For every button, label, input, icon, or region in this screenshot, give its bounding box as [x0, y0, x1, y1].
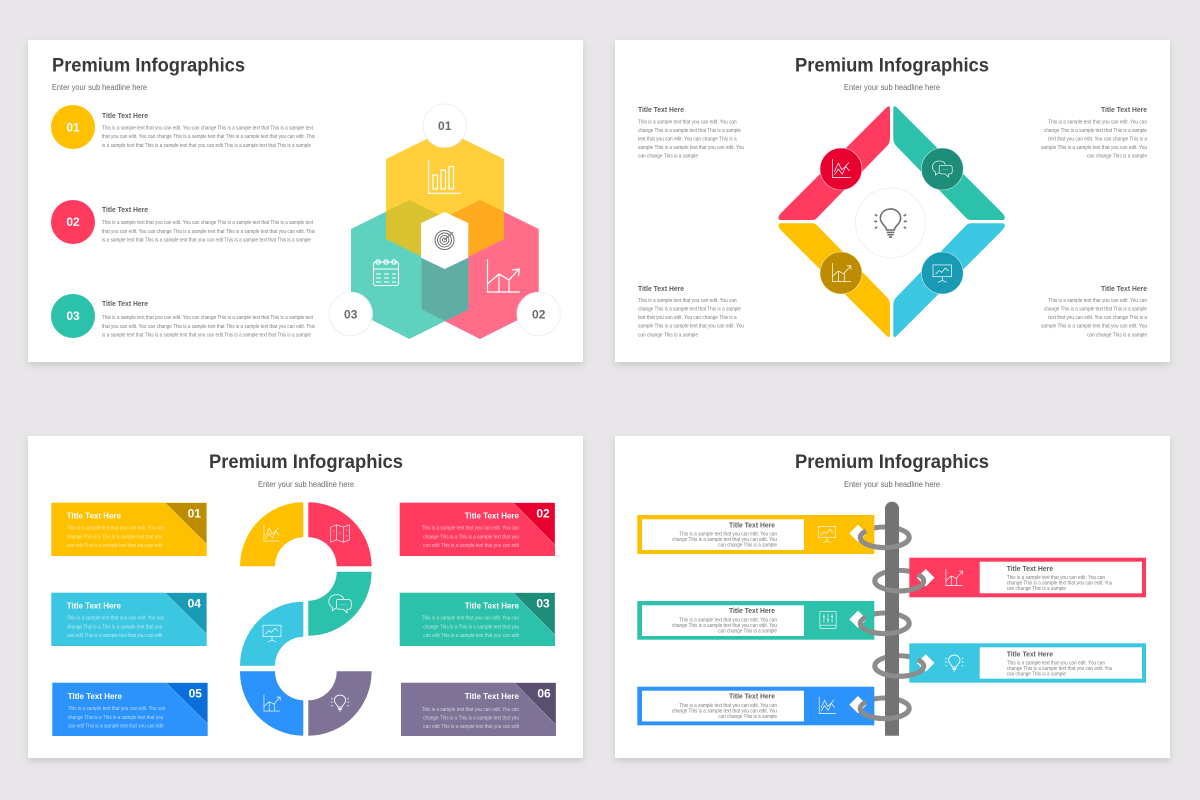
text block bottom right: can change This is a sample [1087, 332, 1147, 338]
segment: blue bottom left [240, 671, 303, 736]
item 01: is a sample text that This is a sample text that you can edit This is a sample text that This is a sample [102, 143, 311, 149]
text block bottom left: can change This is a sample [638, 332, 698, 338]
card 06: 06 [537, 686, 551, 700]
text block bottom right: Title Text Here [1101, 284, 1147, 293]
band: cyan: can change This is a sample [1007, 672, 1066, 678]
card 02: change This is a This is a sample text that you [423, 534, 519, 540]
title: Premium Infographics [795, 451, 989, 473]
band: red: Title Text Here [1007, 564, 1053, 573]
text block bottom left: sample This is a sample text that you can edit. You [638, 324, 744, 330]
card 06: change This is a This is a sample text that you [423, 716, 519, 722]
panel: diamond slide [615, 40, 1170, 362]
band: teal: Title Text Here [729, 606, 775, 615]
band: blue: can change This is a sample [718, 714, 777, 720]
text block top left: can change This is a sample [638, 154, 698, 160]
band: cyan: This is a sample text that you can edit. You can [1007, 660, 1105, 666]
band: red: change This is a sample text that you can edit. You [1007, 580, 1113, 586]
card 06: Title Text Here [465, 691, 519, 701]
item 03: Title Text Here [102, 299, 148, 308]
text block bottom left: text that you can edit. You can change This is a [638, 315, 737, 321]
text block top right: This is a sample text that you can edit. You can [1048, 120, 1147, 126]
text block top left: Title Text Here [638, 105, 684, 114]
panel: venn hexagons slide [28, 40, 583, 362]
card 01: change This is a This is a sample text that you [67, 534, 163, 540]
text block bottom right [1041, 284, 1147, 338]
item 02: Title Text Here [102, 205, 148, 214]
card 01: 01 [188, 506, 201, 520]
subtitle: Enter your sub headline here [52, 82, 147, 92]
subtitle: Enter your sub headline here [844, 82, 940, 92]
text block top left: This is a sample text that you can edit. You can [638, 120, 737, 126]
icon node: teal chat [921, 148, 963, 190]
card 01: can edit This is a sample text that you can edit [67, 543, 163, 549]
item 01: This is a sample text that you can edit. You can change This is a sample text that This is a sample text [102, 126, 314, 132]
item 03: This is a sample text that you can edit. You can change This is a sample text that This is a sample text [102, 315, 314, 321]
segment: purple bottom right [308, 671, 372, 736]
card 02 [400, 503, 555, 556]
card 01: Title Text Here [67, 510, 121, 520]
band: blue: change This is a sample text that you can edit. You [672, 708, 777, 714]
panel: spiral spine slide [615, 436, 1170, 758]
item 02: This is a sample text that you can edit. You can change This is a sample text that This is a sample text [102, 220, 314, 226]
band: teal [637, 601, 874, 640]
card 03: can edit This is a sample text that you can edit [423, 633, 520, 639]
card 05 [52, 683, 208, 736]
card 04: This is a sample text that you can edit. You can [67, 616, 165, 622]
badge 03: 03 [344, 308, 358, 322]
text block top right [1041, 105, 1147, 160]
subtitle: Enter your sub headline here [258, 479, 354, 489]
band: teal: change This is a sample text that you can edit. You [672, 623, 777, 629]
item 02: is a sample text that This is a sample text that you can edit This is a sample text that This is a sample [102, 238, 311, 244]
text block bottom right: change This is a sample text that This is a sample [1044, 306, 1147, 312]
card 02: can edit This is a sample text that you can edit [423, 543, 520, 549]
text block bottom left: change This is a sample text that This is a sample [638, 306, 741, 312]
title: Premium Infographics [795, 54, 989, 76]
band: blue [637, 687, 874, 725]
card 06: can edit This is a sample text that you can edit [423, 724, 520, 730]
band: red [909, 558, 1146, 597]
band: blue: This is a sample text that you can edit. You can [679, 703, 777, 709]
card 04 [51, 593, 207, 646]
band: cyan: change This is a sample text that you can edit. You [1007, 666, 1113, 672]
diamond segments [778, 106, 1005, 337]
icon node: blue presentation [921, 252, 963, 294]
card 04: Title Text Here [67, 600, 121, 610]
card 02: Title Text Here [465, 510, 519, 520]
band: yellow: This is a sample text that you can edit. You can [679, 532, 777, 538]
card 06 [401, 683, 556, 736]
card 04: can edit This is a sample text that you can edit [67, 633, 163, 639]
badge 02 [517, 292, 560, 336]
text block bottom left [638, 284, 744, 338]
card 05: This is a sample text that you can edit. You can [68, 706, 166, 712]
card 03: change This is a This is a sample text that you [423, 624, 519, 630]
text block top left: change This is a sample text that This is a sample [638, 128, 741, 134]
card 05: Title Text Here [68, 691, 122, 701]
card 05: can edit This is a sample text that you can edit [68, 724, 164, 730]
item 03 [51, 294, 315, 338]
band: teal: can change This is a sample [718, 628, 777, 634]
rings: front halves [860, 531, 924, 719]
band: red: This is a sample text that you can edit. You can [1007, 575, 1105, 581]
panel: S-shape slide [28, 436, 583, 758]
center lightbulb [856, 188, 926, 258]
text block bottom right: This is a sample text that you can edit. You can [1048, 298, 1147, 304]
card 01 [51, 503, 207, 556]
item 01: 01 [66, 120, 80, 134]
band: red: can change This is a sample [1007, 586, 1066, 592]
band: cyan: Title Text Here [1007, 650, 1053, 658]
item 02: 02 [66, 215, 80, 229]
icon node: gold chart [820, 252, 862, 294]
band: teal: This is a sample text that you can edit. You can [679, 618, 777, 624]
badge 02: 02 [532, 308, 546, 322]
text block top left: text that you can edit. You can change This is a [638, 136, 737, 142]
text block bottom right: text that you can edit. You can change This is a [1048, 315, 1147, 321]
item 02: that you can edit. You can change This is a sample text that This is a sample text that you can edit. This [102, 229, 315, 235]
badge 01: 01 [438, 119, 452, 133]
item 03: 03 [66, 309, 80, 323]
band: yellow [637, 515, 874, 554]
rings: back halves [860, 527, 924, 719]
text block top right: Title Text Here [1101, 105, 1147, 114]
card 03: Title Text Here [465, 600, 519, 610]
item 03: is a sample text that This is a sample text that you can edit This is a sample text that This is a sample [102, 332, 311, 338]
text block top right: change This is a sample text that This is a sample [1044, 128, 1147, 134]
icon: bar chart [428, 160, 461, 193]
spine [885, 502, 899, 736]
icon: calendar [374, 260, 398, 286]
text block bottom left: This is a sample text that you can edit. You can [638, 298, 737, 304]
segment: red top right [308, 502, 372, 566]
segment: cyan middle left [240, 602, 303, 666]
icon: target [435, 230, 454, 250]
badge 01 [423, 104, 466, 147]
item 03: that you can edit. You can change This is a sample text that This is a sample text that you can edit. This [102, 324, 315, 330]
card 02: This is a sample text that you can edit. You can [422, 526, 519, 532]
band: cyan [909, 643, 1146, 683]
card 06: This is a sample text that you can edit. You can [422, 707, 519, 713]
band: yellow: change This is a sample text that you can edit. You [672, 537, 777, 543]
text block top left [638, 105, 744, 160]
card 04: 04 [188, 596, 201, 610]
card 03 [400, 593, 555, 646]
item 01 [51, 105, 315, 149]
text block bottom right: sample This is a sample text that you can edit. You [1041, 324, 1147, 330]
text block bottom left: Title Text Here [638, 284, 684, 293]
card 01: This is a sample text that you can edit. You can [67, 526, 165, 532]
subtitle: Enter your sub headline here [844, 479, 940, 489]
text block top left: sample This is a sample text that you can edit. You [638, 145, 744, 151]
card 05: change This is a This is a sample text that you [68, 715, 164, 721]
item 02 [51, 200, 315, 244]
band: yellow: Title Text Here [729, 520, 775, 530]
card 03: 03 [536, 596, 550, 610]
card 03: This is a sample text that you can edit. You can [422, 616, 519, 622]
segment: yellow top left [240, 502, 303, 566]
card 05: 05 [189, 686, 202, 700]
item 01: that you can edit. You can change This is a sample text that This is a sample text that you can edit. This [102, 134, 315, 140]
text block top right: can change This is a sample [1087, 154, 1147, 160]
icon node: red line chart [820, 148, 862, 190]
title: Premium Infographics [52, 54, 245, 76]
band: yellow: can change This is a sample [718, 542, 777, 548]
badge 03 [329, 292, 372, 336]
text block top right: text that you can edit. You can change This is a [1048, 136, 1147, 142]
text block top right: sample This is a sample text that you can edit. You [1041, 145, 1147, 151]
card 04: change This is a This is a sample text that you [67, 624, 163, 630]
band: blue: Title Text Here [729, 692, 775, 701]
title: Premium Infographics [209, 451, 403, 473]
icon: rising chart [488, 259, 520, 292]
item 01: Title Text Here [102, 111, 148, 120]
hexagon venn diagram [351, 130, 539, 339]
segment: teal middle right [308, 572, 372, 636]
card 02: 02 [536, 506, 550, 520]
